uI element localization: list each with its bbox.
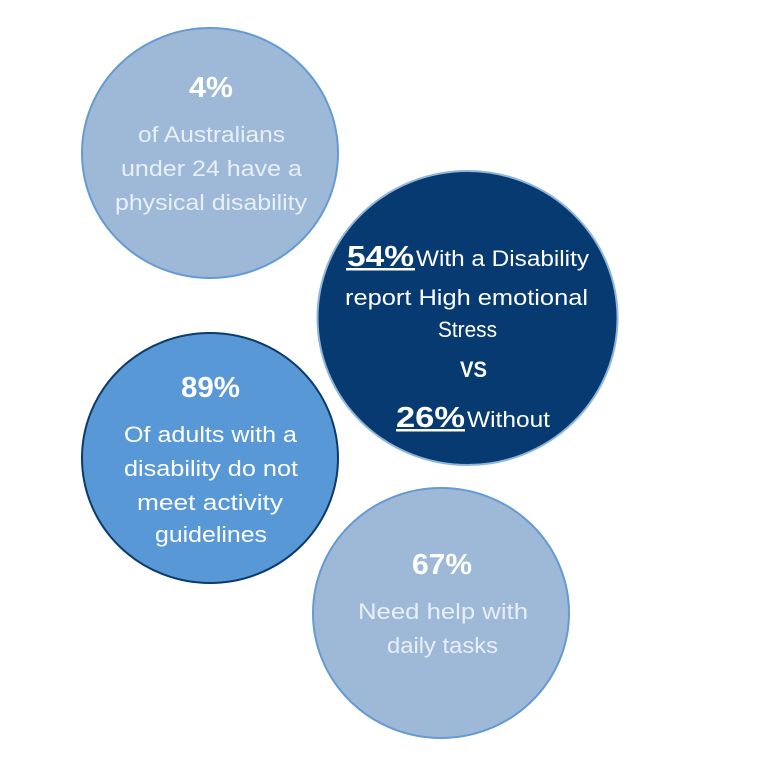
text: report high emotional stress: report High emotional xyxy=(345,285,588,310)
text: need help with daily tasks xyxy=(358,599,528,658)
text: of adults with a disability do not meet activity guidelines: Of adults with a xyxy=(124,422,298,447)
stat: 26% without: 26% xyxy=(396,402,465,434)
panel: 4% of Australians under 24 xyxy=(82,28,338,278)
panel: 89% of adults xyxy=(82,333,338,583)
stat: 4%: 4% xyxy=(189,72,233,104)
text: report high emotional stress xyxy=(345,285,588,342)
text: of Australians under 24 have a physical disability xyxy=(115,122,307,215)
text: need help with daily tasks: daily tasks xyxy=(387,633,498,658)
text: of adults with a disability do not meet activity guidelines: disability do not xyxy=(124,456,298,481)
stat: 54% with a disability: 54% xyxy=(347,241,414,273)
text: of Australians under 24 have a physical disability: under 24 have a xyxy=(121,156,303,181)
text: of adults with a disability do not meet activity guidelines: guidelines xyxy=(155,522,267,547)
stat: 54% with a disability: With a Disability xyxy=(416,246,589,271)
stat: 67%: 67% xyxy=(412,549,472,581)
text: need help with daily tasks: Need help with xyxy=(358,599,528,624)
text: report high emotional stress: Stress xyxy=(438,317,497,342)
text: of adults with a disability do not meet activity guidelines: meet activity xyxy=(137,490,283,515)
stat: 26% without: Without xyxy=(467,407,550,432)
panel: 54% vs 26% emotional stress xyxy=(318,171,618,465)
stat: 54% with a disability xyxy=(346,241,589,273)
panel: 67% need help xyxy=(313,488,569,738)
stat: 89%: 89% xyxy=(181,372,240,404)
text: of adults with a disability do not meet activity guidelines xyxy=(124,422,298,547)
text: of Australians under 24 have a physical disability: of Australians xyxy=(138,122,285,147)
stat: 26% without xyxy=(396,402,550,434)
text: VS: VS xyxy=(460,357,487,382)
text: of Australians under 24 have a physical disability: physical disability xyxy=(115,190,307,215)
